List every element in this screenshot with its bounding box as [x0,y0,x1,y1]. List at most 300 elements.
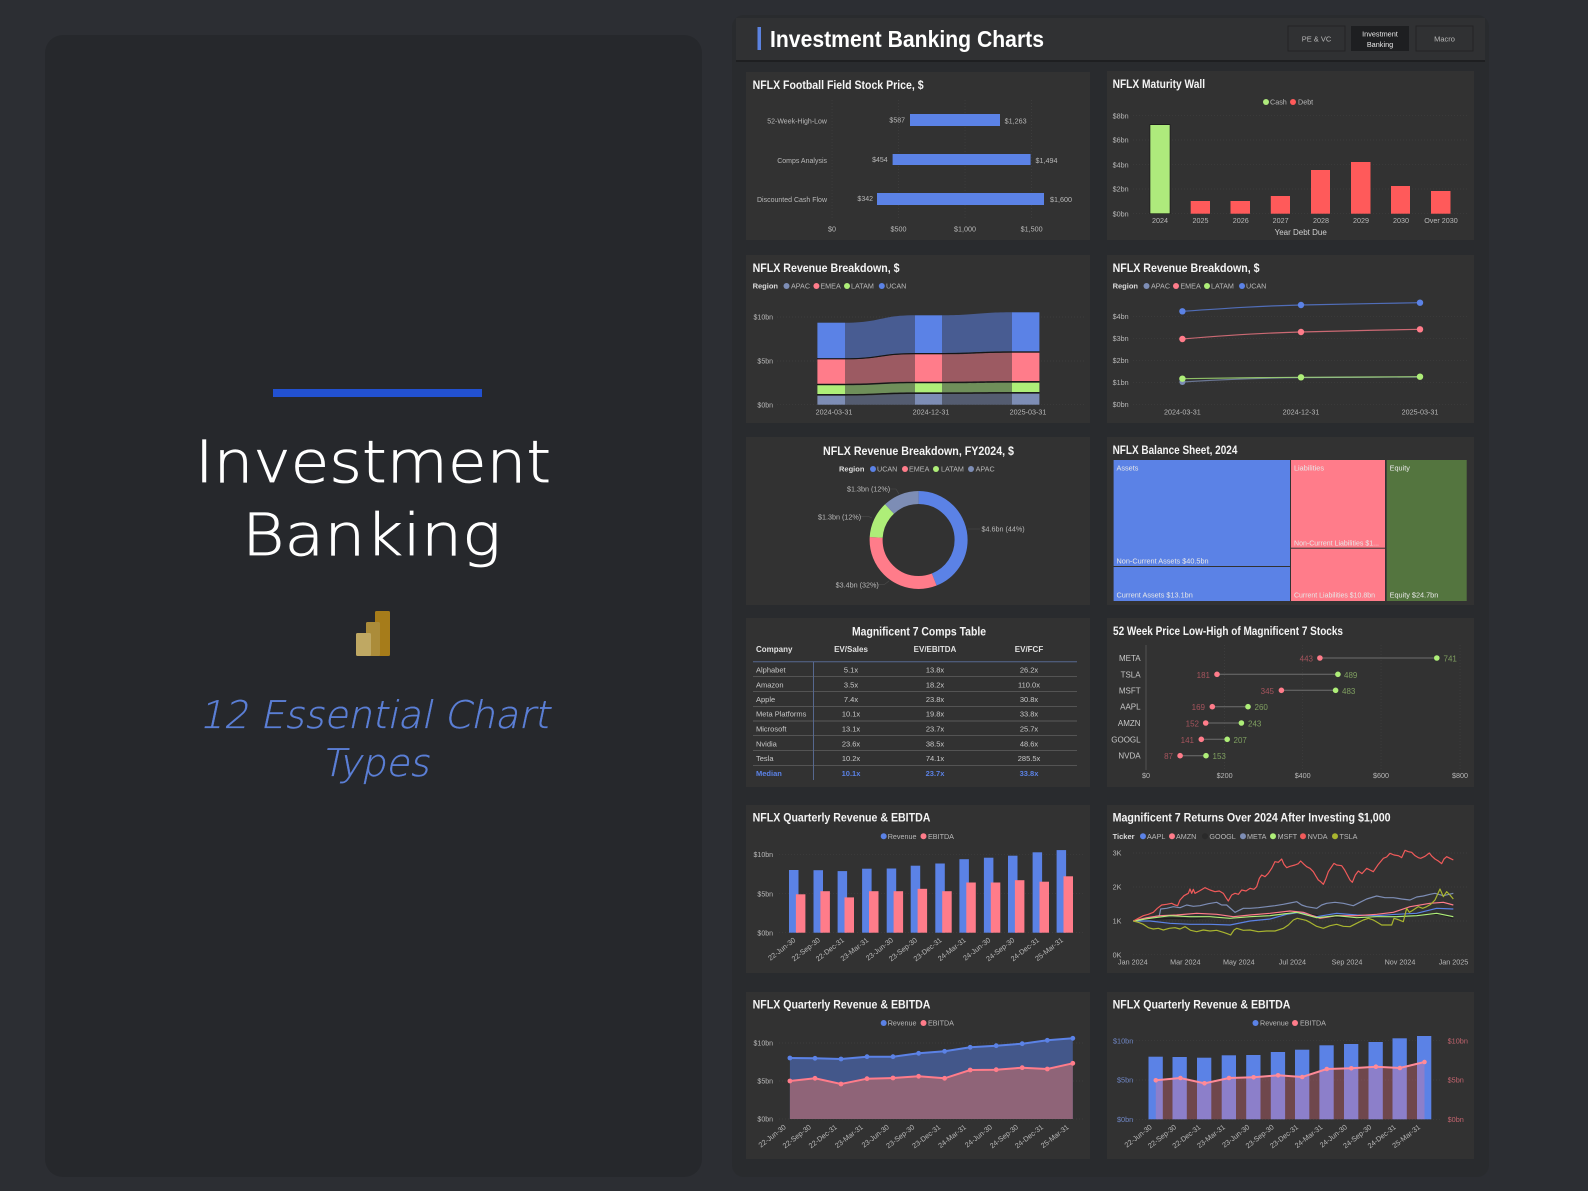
x axis labels: 2028 [1313,216,1329,225]
bar labels: $1,263 [1005,116,1027,126]
low points [1177,655,1323,758]
legend: EBITDA [928,1019,954,1028]
EBITDA area [790,1063,1073,1119]
header accent [758,27,761,50]
accent bar [273,389,482,397]
x axis labels: 23-Jun-30 [1220,1122,1251,1150]
grid [1133,316,1467,404]
legend: Cash [1270,98,1287,106]
icon: Power BI logo [356,611,390,656]
table header: EV/Sales [834,645,868,654]
bar labels: Discounted Cash Flow [757,197,828,204]
y axis labels: $0bn [757,930,773,937]
legend: APAC [976,465,995,474]
right y axis labels: $10bn [1448,1036,1468,1045]
subtitle [197,693,556,786]
panel: quarterly combo chart [1107,992,1474,1159]
x axis labels: 23-Sep-30 [884,1122,916,1150]
legend: MSFT [1278,832,1298,841]
right y axis labels: $5bn [1448,1076,1464,1085]
x axis labels: Over 2030 [1424,216,1458,225]
bar labels: $1,600 [1050,195,1072,204]
legend: EMEA [909,465,930,474]
table rows: 26.2x [1020,666,1038,675]
high labels: 741 [1444,654,1457,664]
subtitle: 12 Essential Chart [197,693,556,738]
high labels: 207 [1234,736,1247,745]
x axis labels: 24-Sep-30 [988,1122,1020,1150]
x axis labels [816,407,1046,416]
x axis labels: $200 [1217,771,1233,780]
chart title: 52 Week Price Low-High of Magnificent 7 Stocks [1113,624,1343,638]
dashboard title: Investment Banking Charts [770,26,1044,52]
low labels: 345 [1261,687,1275,696]
x axis labels: 24-Jun-30 [961,935,992,963]
panel: quarterly area chart [746,992,1090,1159]
legend [881,1019,954,1028]
button: PE & VC [1288,26,1345,51]
y axis labels: 0K [1113,950,1122,959]
x axis labels [828,224,1043,234]
x axis labels: 24-Dec-31 [1366,1122,1398,1150]
treemap labels: Liabilities [1294,464,1324,473]
table header: Company [756,645,793,654]
donut [876,498,961,582]
x axis labels: 22-Sep-30 [1146,1122,1178,1150]
range bars [877,114,1044,205]
y axis labels: $3bn [1113,334,1129,343]
x axis labels: 24-Dec-31 [1013,1122,1045,1150]
x axis labels [1118,957,1468,966]
ticker labels: MSFT [1119,686,1141,695]
table header: EV/FCF [1015,645,1043,654]
treemap labels: Non-Current Liabilities $1... [1294,538,1379,547]
table rows: Apple [756,695,775,704]
bar labels: $454 [872,157,888,164]
table rows: Tesla [756,754,774,763]
ticker labels [1111,654,1141,761]
treemap labels: Current Liabilities $10.8bn [1294,591,1375,600]
legend: Revenue [1260,1019,1289,1028]
bar labels: $1,494 [1036,156,1057,165]
grid and axis [1225,645,1460,770]
chart title: NFLX Balance Sheet, 2024 [1113,443,1238,457]
table rows: 74.1x [926,754,944,763]
x axis labels: 22-Sep-30 [781,1122,813,1150]
low labels: 87 [1164,752,1174,761]
title: Investment [195,428,551,496]
table rows: 285.5x [1018,754,1041,763]
x axis labels: 22-Dec-31 [807,1122,839,1150]
table rows: 38.5x [926,739,944,748]
low labels: 141 [1181,736,1195,745]
right y axis labels: $0bn [1448,1115,1464,1124]
x axis labels: 2025-03-31 [1402,407,1438,416]
x axis labels: 2030 [1393,216,1409,225]
grid [832,100,1032,218]
bars [1150,125,1450,214]
title [195,428,551,569]
x axis labels: 25-Mar-31 [1390,1122,1422,1150]
median row: 23.7x [926,769,945,778]
ticker labels: GOOGL [1111,735,1141,744]
legend: Debt [1298,98,1313,106]
grid [777,317,1086,405]
chart title: Magnificent 7 Comps Table [852,625,986,639]
treemap labels: Non-Current Assets $40.5bn [1116,556,1209,565]
legend [1252,1019,1326,1028]
x axis labels: 2025-03-31 [1010,407,1046,416]
y axis labels: $4bn [1113,312,1129,321]
x axis labels: Nov 2024 [1385,957,1415,966]
separators [817,352,1039,395]
treemap labels: Equity $24.7bn [1390,591,1438,600]
legend: Region [839,465,865,474]
legend [753,282,906,291]
EBITDA line [1154,1060,1427,1086]
y axis labels: 3K [1113,849,1122,858]
y axis labels: $4bn [1113,160,1129,169]
legend: APAC [1151,282,1170,291]
low labels: 169 [1192,703,1206,712]
grid [1133,1041,1440,1119]
x axis labels: 23-Dec-31 [910,1122,942,1150]
x axis labels: 23-Mar-31 [833,1122,865,1150]
chart title: NFLX Revenue Breakdown, FY2024, $ [823,444,1014,458]
table rows: 10.2x [842,754,860,763]
y axis labels [754,852,773,937]
high labels: 489 [1344,671,1358,680]
button: Investment Banking: Banking [1367,40,1393,49]
legend: AMZN [1176,832,1196,841]
low labels: 181 [1197,671,1211,680]
x axis labels: 2029 [1353,216,1369,225]
table rows: Microsoft [756,724,787,733]
x axis labels: 24-Jun-30 [963,1122,994,1150]
y axis labels: 2K [1113,883,1122,892]
bar labels: $342 [857,196,873,203]
legend: Revenue [888,1019,916,1028]
legend [1263,98,1313,106]
high labels: 260 [1254,703,1268,712]
EBITDA bars [796,876,1073,933]
legend: EMEA [820,282,841,291]
ticker labels: AMZN [1118,719,1141,728]
revenue area [790,1038,1073,1119]
legend: NVDA [1308,832,1328,841]
donut labels: $4.6bn (44%) [982,525,1025,534]
chart title: NFLX Quarterly Revenue & EBITDA [753,997,931,1011]
x axis labels: 23-Jun-30 [864,935,895,963]
panel: magnificent 7 returns [1107,805,1474,973]
table rows: Meta Platforms [756,710,807,719]
y axis labels [1113,849,1122,959]
y axis labels [754,315,773,409]
panel: dashboard [732,15,1489,1177]
y axis labels: $0bn [1113,209,1129,218]
x axis title: Year Debt Due [1275,228,1327,237]
median row: 10.1x [842,769,861,778]
y axis labels: $1bn [1113,378,1129,387]
bar labels: $587 [889,118,905,124]
chart title: NFLX Revenue Breakdown, $ [1113,261,1260,275]
panel: revenue ribbon chart [746,255,1090,423]
x axis labels: 22-Jun-30 [1123,1122,1154,1150]
table rows: 23.8x [926,695,944,704]
high labels: 153 [1212,752,1226,761]
x axis labels: 23-Mar-31 [1195,1122,1227,1150]
x axis labels: 24-Sep-30 [984,935,1016,963]
subtitle: Types [319,741,436,786]
table rows: Amazon [756,680,784,689]
x axis labels: 22-Jun-30 [757,1122,788,1150]
y axis labels [1113,312,1129,409]
x axis labels: Mar 2024 [1170,957,1200,966]
legend: UCAN [886,282,906,291]
x axis labels: Jan 2024 [1118,957,1148,966]
x axis labels: $400 [1295,771,1311,780]
chart title: NFLX Quarterly Revenue & EBITDA [1113,997,1291,1011]
x axis labels: 23-Jun-30 [860,1122,891,1150]
x axis labels: 25-Mar-31 [1033,935,1065,963]
table rows: 18.2x [926,680,944,689]
x axis labels: 23-Mar-31 [839,935,870,963]
y axis labels: 1K [1113,917,1122,926]
panel: comps table [746,618,1090,787]
ticker labels: META [1119,654,1141,663]
x axis labels: 2024-03-31 [1164,407,1201,416]
x axis labels: 24-Mar-31 [1293,1122,1324,1150]
table rows: 19.8x [926,710,944,719]
button: Investment Banking: Investment [1362,30,1398,38]
y axis labels [1113,111,1129,218]
x axis labels: 2024 [1152,216,1168,225]
y axis labels: $5bn [757,359,773,366]
grid [1133,853,1467,955]
x axis labels: 2025 [1192,216,1208,225]
x axis labels: 22-Dec-31 [814,935,846,963]
points [1179,300,1423,385]
x axis labels: 24-Dec-31 [1009,935,1041,963]
median row: Median [756,769,782,778]
donut labels: $1.3bn (12%) [847,485,890,494]
grid [779,1043,1084,1119]
chart title: NFLX Football Field Stock Price, $ [753,78,924,92]
table rows: 110.0x [1018,680,1040,689]
grid [779,854,1084,933]
table rows: 13.8x [926,666,944,675]
low labels: 152 [1186,720,1200,728]
EBITDA line [788,1061,1075,1086]
median row [756,769,1039,778]
panel: revenue donut chart [746,437,1090,605]
legend: AAPL [1147,832,1165,841]
treemap labels: Equity [1390,464,1410,473]
x axis labels: 2027 [1273,216,1289,225]
y axis labels [754,1041,773,1124]
x axis labels: 24-Mar-31 [936,935,968,963]
lines [1182,303,1420,382]
table rows: 48.6x [1020,739,1038,748]
table rows: 5.1x [844,666,858,675]
y axis labels: $10bn [754,852,773,859]
x axis labels: 25-Mar-31 [1039,1122,1071,1150]
x axis labels: Jul 2024 [1279,957,1306,966]
panel: 52 week dumbbell chart [1107,618,1474,787]
x axis labels [1123,1122,1422,1150]
bar labels: Comps Analysis [777,158,827,165]
legend [1113,282,1266,291]
panel: quarterly clustered bars [746,805,1090,973]
table rows: 7.4x [844,695,858,704]
legend: EBITDA [928,832,954,841]
panel: football field chart [746,72,1090,240]
x axis labels: 24-Sep-30 [1341,1122,1373,1150]
ribbons [845,312,1012,405]
y axis labels: $0bn [1113,400,1129,409]
x axis labels: 24-Mar-31 [936,1122,968,1150]
x axis labels: Sep 2024 [1332,957,1362,966]
legend: LATAM [851,282,874,291]
y axis labels: $2bn [1113,185,1129,194]
button: Investment Banking [1351,26,1409,51]
y axis labels: $6bn [1113,136,1129,145]
table rows: 23.7x [926,724,944,733]
x axis labels: $0 [1142,771,1150,780]
legend: EMEA [1180,282,1201,291]
x axis labels: $600 [1373,771,1389,780]
x axis labels: $1,000 [954,224,976,234]
ticker labels: AAPL [1120,703,1141,712]
y axis labels: $8bn [1113,111,1129,120]
x axis labels: 23-Sep-30 [1244,1122,1276,1150]
table rows: Nvidia [756,739,778,748]
x axis labels: 22-Sep-30 [790,935,822,963]
x axis labels: $0 [828,224,836,234]
left y axis labels: $10bn [1113,1036,1133,1045]
legend [839,465,995,474]
low labels: 443 [1300,654,1314,664]
donut labels: $1.3bn (12%) [818,512,861,521]
button: PE & VC: PE & VC [1302,34,1332,44]
y axis labels: $0bn [757,402,773,409]
legend: Ticker [1113,832,1135,841]
legend: META [1247,832,1267,841]
revenue bars [1148,1036,1431,1119]
y axis labels: $2bn [1113,356,1129,365]
left y axis labels: $5bn [1117,1076,1133,1085]
revenue line [788,1036,1075,1061]
y axis labels: $5bn [757,891,773,898]
stacked columns [817,312,1039,405]
x axis labels [1142,771,1468,780]
button: Macro [1416,26,1473,51]
legend [1113,832,1358,841]
treemap cells [1114,460,1467,601]
table rules [753,662,1077,780]
y axis labels: $0bn [757,1117,773,1124]
x axis labels: $800 [1452,771,1468,780]
x axis labels [766,935,1065,963]
panel: maturity wall chart [1107,71,1474,240]
header bar [736,18,1485,62]
panel: cover [45,35,702,1177]
x axis labels: 23-Dec-31 [1268,1122,1300,1150]
treemap labels: Current Assets $13.1bn [1116,591,1193,600]
x axis labels [1152,216,1458,225]
left y axis labels: $0bn [1117,1115,1133,1124]
legend [881,832,954,841]
legend: APAC [791,282,810,291]
panel: revenue line chart [1107,255,1474,423]
x axis labels: May 2024 [1223,957,1255,966]
low labels [1164,654,1314,761]
legend: UCAN [1246,282,1266,291]
table rows: Alphabet [756,666,787,675]
revenue bars [789,850,1066,933]
button: Macro: Macro [1434,34,1455,44]
x axis labels [1164,407,1438,416]
legend: Region [753,282,778,291]
x axis labels: $1,500 [1021,224,1043,234]
x axis labels [757,1122,1071,1150]
y axis labels: $10bn [754,1041,773,1048]
x axis labels: 24-Jun-30 [1318,1122,1349,1150]
left y axis labels [1113,1036,1133,1124]
x axis labels: 23-Dec-31 [912,935,944,963]
y axis labels: $10bn [754,315,773,322]
median row: 33.8x [1020,769,1039,778]
table rows: 13.1x [842,724,860,733]
table header: EV/EBITDA [914,645,957,654]
chart title: NFLX Quarterly Revenue & EBITDA [753,811,931,825]
legend: Region [1113,282,1138,291]
table header [756,645,1043,654]
treemap labels: Assets [1116,464,1139,473]
legend: GOOGL [1209,832,1236,841]
right y axis labels [1448,1036,1468,1124]
table rows: 33.8x [1020,710,1038,719]
table rows: 30.8x [1020,695,1038,704]
chart title: Magnificent 7 Returns Over 2024 After Investing $1,000 [1113,811,1391,825]
x axis labels: 2024-03-31 [816,407,852,416]
chart title: NFLX Maturity Wall [1113,77,1205,91]
x axis labels: Jan 2025 [1439,957,1468,966]
donut labels [818,485,1025,589]
legend: EBITDA [1300,1019,1326,1028]
high labels: 483 [1342,687,1356,696]
donut labels: $3.4bn (32%) [836,580,879,589]
legend: Revenue [888,832,916,841]
treemap labels [1116,464,1438,600]
bar labels [757,116,1072,204]
legend: UCAN [877,465,897,474]
EBITDA area [1156,1062,1424,1119]
x axis labels: 2024-12-31 [1283,407,1319,416]
x axis labels: 22-Dec-31 [1170,1122,1202,1150]
x axis labels: 2024-12-31 [913,407,949,416]
ticker labels: TSLA [1121,670,1141,679]
high labels [1212,654,1457,761]
y axis labels: $5bn [757,1079,773,1086]
table rows: 10.1x [842,710,860,719]
table rows: 3.5x [844,680,858,689]
x axis labels: $500 [890,224,906,234]
grid [1133,116,1467,214]
legend: LATAM [941,465,964,474]
legend: LATAM [1211,282,1234,291]
x axis labels: 2026 [1233,216,1249,225]
